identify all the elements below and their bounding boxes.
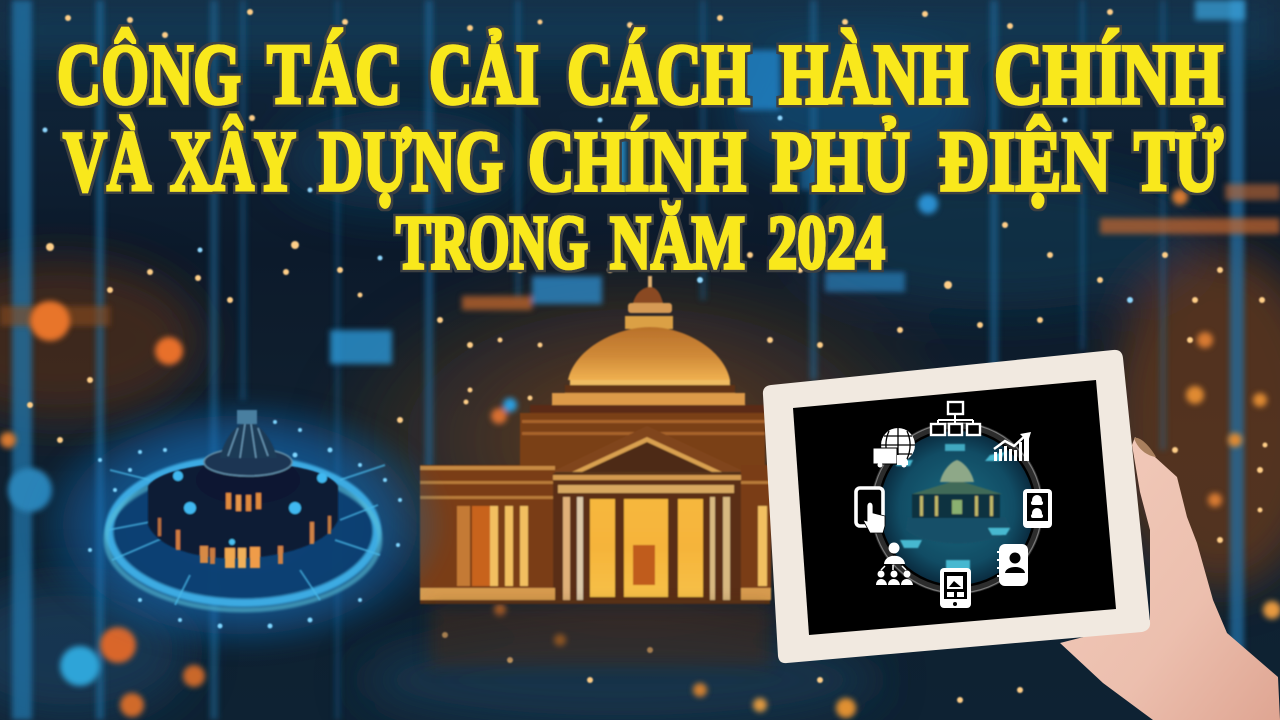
title line 2: ĐIỆN [939, 113, 1111, 209]
tablet [763, 350, 1150, 663]
title line 2: VÀ [63, 113, 151, 209]
title line 3 [396, 201, 885, 285]
orange domed building [420, 276, 771, 666]
icon: people hierarchy [876, 542, 913, 585]
icon: tablet with clouds [1023, 489, 1052, 528]
hand holding tablet [1060, 437, 1280, 720]
title line 2: TỬ [1134, 113, 1223, 209]
title [57, 26, 1223, 285]
title line 1: TÁC [267, 26, 401, 122]
title line 3: TRONG [396, 201, 588, 285]
icon: globe and truck [873, 428, 915, 468]
title line 3: NĂM [610, 201, 745, 285]
icon: computer network [931, 402, 980, 435]
tablet screen [793, 380, 1116, 635]
title line 1: HÀNH [779, 26, 968, 122]
title line 2: DỰNG [319, 113, 503, 209]
title line 1: CHÍNH [994, 26, 1223, 122]
tablet frame [763, 350, 1150, 663]
icon: growth chart [994, 432, 1031, 461]
title line 1 [57, 26, 1223, 122]
title line 2: XÂY [170, 113, 296, 209]
title line 1: CÔNG [57, 26, 241, 122]
icon: tablet with image [940, 568, 971, 608]
title line 2 [63, 113, 1223, 209]
circular hub image [872, 423, 1042, 593]
title line 3: 2024 [768, 201, 885, 285]
blue digital building on glowing disc [30, 395, 450, 655]
title line 1: CẢI [429, 26, 539, 122]
icon: touch tablet [856, 488, 885, 533]
title line 2: PHỦ [772, 113, 910, 209]
title line 1: CÁCH [567, 26, 750, 122]
title line 2: CHÍNH [528, 113, 746, 209]
icon: contact book [997, 544, 1028, 586]
